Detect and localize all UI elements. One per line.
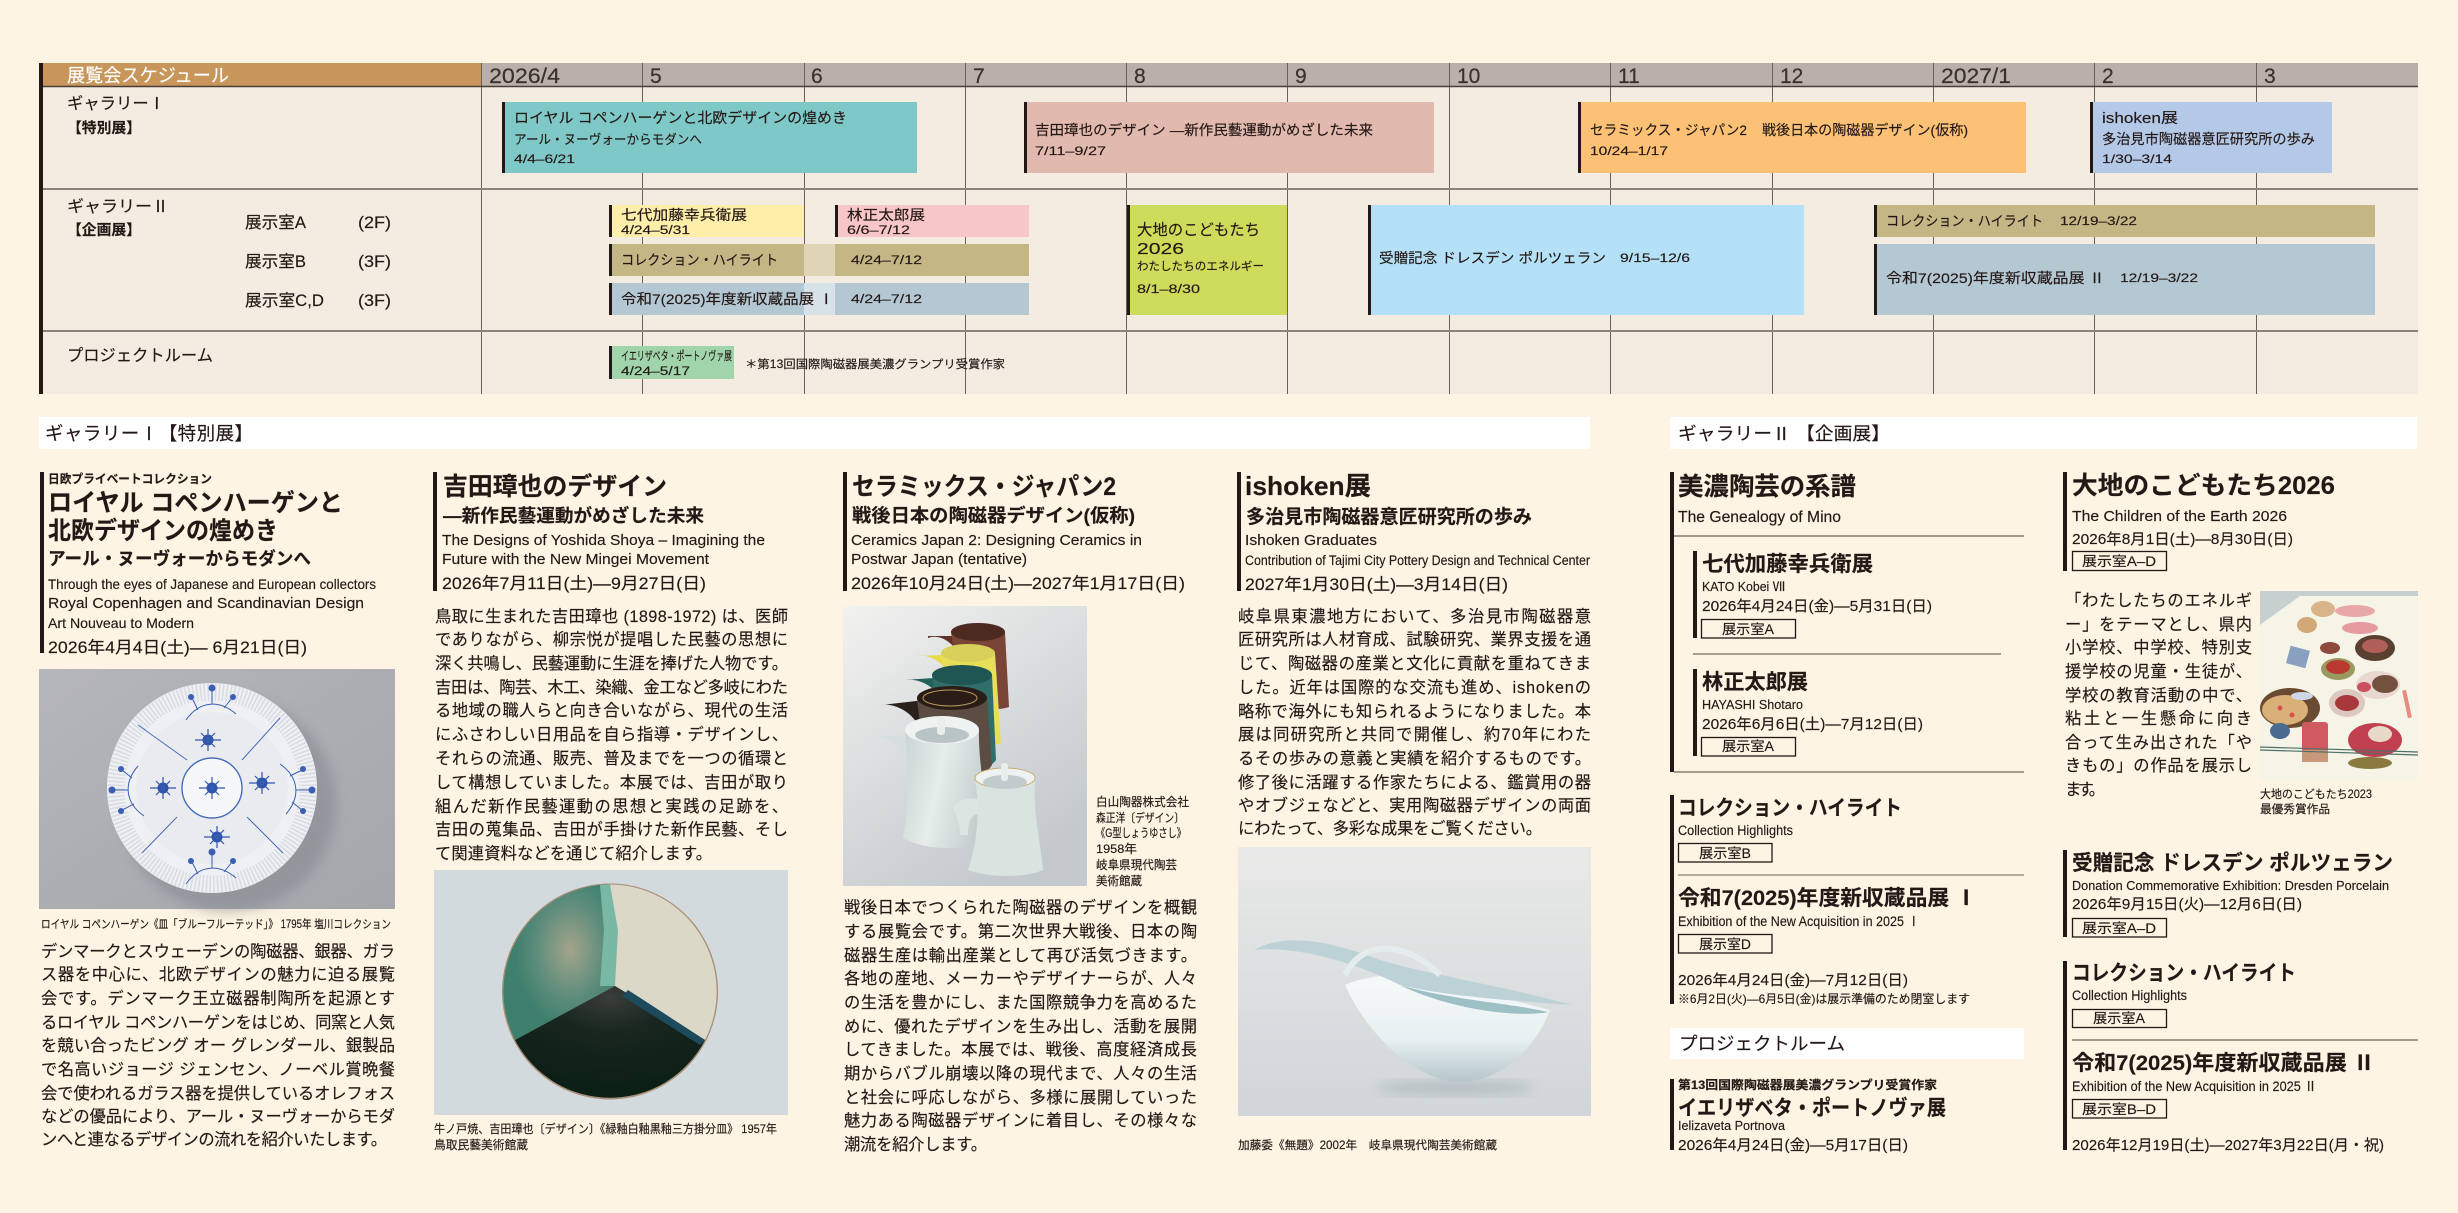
bar: Yoshida Shoya: 7/11–9/27 bbox=[1035, 144, 1106, 158]
bar: New Acquisition I: 令和7(2025)年度新収蔵品展 Ⅰ bbox=[621, 291, 834, 307]
panel: Ielizaveta Portnova exhibition bbox=[1670, 1077, 1946, 1154]
bar: Hayashi Shotaro: 林正太郎展 bbox=[847, 207, 925, 223]
body text: 戦後日本でつくられた陶磁器のデザインを概観 bbox=[844, 898, 1197, 917]
exhibition heading: Through the eyes of Japanese and European collectors bbox=[48, 576, 376, 592]
exhibition: New Acquisition I: Exhibition of the New Acquisition in 2025 Ⅰ bbox=[1678, 914, 1920, 929]
body text: 略称で海外にも知られるようになりました。本 bbox=[1238, 703, 1591, 721]
body text: 会で使われるガラス器を提供しているオレフォス bbox=[41, 1085, 395, 1103]
body text: きもの」の作品を展示し bbox=[2065, 757, 2252, 775]
panel: Collection Highlights and New Acquisition I bbox=[1670, 795, 2024, 1006]
sub-exhibition: Hayashi Shotaro: 展示室A bbox=[1722, 739, 1774, 754]
bar: New Acquisition I: 4/24–7/12 bbox=[851, 294, 922, 306]
sub-exhibition: Kato Kobei: 展示室A bbox=[1722, 622, 1774, 637]
bar: Ceramics Japan 2: セラミックス・ジャパン2 bbox=[1590, 122, 1747, 138]
bar: Children of the Earth: わたしたちのエネルギー bbox=[1137, 260, 1264, 273]
bar: ishoken: 多治見市陶磁器意匠研究所の歩み bbox=[2102, 131, 2315, 147]
body text: るその歩みの意義と実績を紹介するものです。 bbox=[1238, 750, 1591, 768]
exhibition heading: 2026年10月24日(土)—2027年1月17日(日) bbox=[851, 574, 1185, 593]
body text: 組んだ新作民藝運動の思想と実践の足跡を、 bbox=[435, 798, 788, 816]
caption: 加藤委《無題》2002年 岐阜県現代陶芸美術館蔵 bbox=[1238, 1138, 1497, 1152]
panel: Ielizaveta Portnova exhibition: 第13回国際陶磁器展美濃グランプリ受賞作家 bbox=[1678, 1077, 1937, 1092]
row labels: 展示室B bbox=[245, 253, 306, 271]
heading bbox=[1678, 473, 1856, 526]
bar: Children of the Earth: 8/1–8/30 bbox=[1137, 284, 1200, 296]
caption: 最優秀賞作品 bbox=[2260, 803, 2330, 816]
exhibition heading: Future with the New Mingei Movement bbox=[442, 551, 710, 568]
sub-exhibition: Hayashi Shotaro: 林正太郎展 bbox=[1702, 671, 1808, 694]
row labels: ギャラリーⅡ bbox=[67, 198, 169, 216]
panel: Gallery I heading: ギャラリーⅠ【特別展】 bbox=[45, 423, 253, 444]
body text: ンへと連なるデザインの流れを紹介いたします。 bbox=[41, 1130, 387, 1149]
exhibition: Collection Highlights: コレクション・ハイライト bbox=[2072, 962, 2296, 985]
heading: The Children of the Earth 2026 bbox=[2072, 509, 2287, 525]
row labels: (3F) bbox=[358, 253, 391, 271]
exhibition heading: 吉田璋也のデザイン bbox=[443, 472, 667, 501]
body text: で名高いジョージ ジェンセン、ノーベル賞晩餐 bbox=[41, 1061, 395, 1079]
row labels: 【企画展】 bbox=[67, 221, 141, 239]
bar: Royal Copenhagen: アール・ヌーヴォーからモダンへ bbox=[514, 132, 702, 147]
month header labels: 3 bbox=[2264, 65, 2276, 88]
body text: 合って生み出された「や bbox=[2065, 734, 2252, 752]
body text: する展覧会です。第二次世界大戦後、日本の陶 bbox=[844, 923, 1197, 941]
bar: Ielizaveta Portnova: イエリザベタ・ポートノヴァ展 bbox=[621, 348, 732, 363]
caption: 大地のこどもたち2023 bbox=[2260, 787, 2372, 801]
bar: Children of the Earth: 大地のこどもたち bbox=[1137, 221, 1260, 239]
exhibition heading: Ceramics Japan 2: Designing Ceramics in bbox=[851, 532, 1142, 549]
body text: を競い合ったビング オー グレンダール、銀製品 bbox=[41, 1037, 395, 1055]
bar: Royal Copenhagen bbox=[502, 102, 917, 173]
panel: Project Room heading bbox=[1670, 1028, 2024, 1059]
bar: Ceramics Japan 2: 戦後日本の陶磁器デザイン(仮称) bbox=[1762, 122, 1968, 138]
bar: ishoken: ishoken展 bbox=[2102, 111, 2178, 127]
panel: exhibition schedule bbox=[39, 63, 2418, 394]
heading: 2026年8月1日(土)—8月30日(日) bbox=[2072, 531, 2293, 548]
row labels: (2F) bbox=[358, 214, 391, 232]
photo: clay food artworks bbox=[2260, 591, 2418, 780]
body text bbox=[2065, 592, 2252, 799]
body text: の生活を豊かにし、また国際競争力を高めるた bbox=[844, 994, 1197, 1012]
panel: Dresden Porcelain exhibition: Donation Commemorative Exhibition: Dresden Porcelain bbox=[2072, 879, 2389, 893]
body text: 「わたしたちのエネルギ bbox=[2065, 592, 2252, 610]
panel: Royal Copenhagen exhibition bbox=[39, 471, 395, 1149]
photo: three-glaze plate bbox=[434, 870, 788, 1115]
exhibition: New Acquisition II: 2026年12月19日(土)—2027年3月22日(月・祝) bbox=[2072, 1137, 2384, 1154]
month header labels: 5 bbox=[650, 65, 662, 88]
body text bbox=[41, 942, 395, 1149]
exhibition: New Acquisition I bbox=[1678, 887, 1977, 1006]
body text: 展は同研究所と共同で開催し、約70年にわた bbox=[1238, 726, 1591, 744]
panel: Gallery I heading bbox=[39, 417, 1590, 449]
exhibition heading: 戦後日本の陶磁器デザイン(仮称) bbox=[852, 505, 1135, 526]
exhibition heading: 2027年1月30日(土)—3月14日(日) bbox=[1245, 575, 1508, 594]
schedule heading: 展覧会スケジュール bbox=[67, 65, 229, 86]
exhibition: New Acquisition II: Exhibition of the New Acquisition in 2025 Ⅱ bbox=[2072, 1079, 2317, 1094]
body text: それらの流通、販売、普及までを一つの循環と bbox=[435, 750, 788, 768]
body text: 粘土と一生懸命に向き bbox=[2065, 710, 2252, 728]
month header labels: 6 bbox=[811, 65, 823, 88]
body text: して構想していました。本展では、吉田が取り bbox=[435, 774, 788, 792]
exhibition: Collection Highlights bbox=[2072, 962, 2296, 1028]
row labels bbox=[67, 95, 391, 365]
panel: Children of the Earth 2026 bbox=[2063, 472, 2418, 816]
body text: 深く共鳴し、民藝運動に生涯を捧げた人物です。 bbox=[435, 655, 788, 673]
bar: ishoken bbox=[2090, 102, 2332, 173]
body text: 匠研究所は人材育成、試験研究、業界支援を通 bbox=[1238, 631, 1591, 649]
body text: 援学校の児童・生徒が、 bbox=[2065, 663, 2252, 681]
sub-exhibition: Kato Kobei: KATO Kobei Ⅶ bbox=[1702, 579, 1785, 594]
bar: Dresden Porcelain: 9/15–12/6 bbox=[1620, 253, 1690, 265]
body text: などの優品により、アール・ヌーヴォーからモダ bbox=[41, 1108, 395, 1126]
exhibition heading: 多治見市陶磁器意匠研究所の歩み bbox=[1246, 506, 1532, 528]
caption bbox=[1096, 794, 1189, 888]
exhibition heading: The Designs of Yoshida Shoya – Imagining the bbox=[442, 532, 765, 549]
body text: 修了後に活躍する作家たちによる、鑑賞用の器 bbox=[1238, 774, 1591, 792]
sub-exhibition: Kato Kobei: 七代加藤幸兵衛展 bbox=[1702, 553, 1873, 576]
heading: 美濃陶芸の系譜 bbox=[1678, 473, 1856, 501]
exhibition: Collection Highlights: Collection Highlights bbox=[1678, 823, 1793, 838]
body text: ます。 bbox=[2065, 781, 2105, 799]
exhibition: New Acquisition II: 令和7(2025)年度新収蔵品展 Ⅱ bbox=[2072, 1052, 2375, 1075]
exhibition: New Acquisition I: ※6月2日(火)—6月5日(金)は展示準備のため閉室します bbox=[1678, 991, 1970, 1006]
sub-exhibition: Kato Kobei: 2026年4月24日(金)—5月31日(日) bbox=[1702, 598, 1932, 615]
sub-exhibition: Hayashi Shotaro: HAYASHI Shotaro bbox=[1702, 697, 1803, 712]
heading bbox=[2072, 472, 2335, 570]
bar: New Acquisition II bbox=[1874, 244, 2375, 315]
exhibition heading bbox=[1245, 471, 1590, 594]
bar: Ielizaveta Portnova bbox=[609, 346, 734, 379]
panel: Gallery II heading bbox=[1670, 417, 2417, 449]
panel: Ielizaveta Portnova exhibition: 2026年4月24日(金)—5月17日(日) bbox=[1678, 1137, 1908, 1154]
caption: 鳥取民藝美術館蔵 bbox=[434, 1137, 528, 1152]
heading: 大地のこどもたち2026 bbox=[2072, 472, 2335, 500]
bar: Ceramics Japan 2 bbox=[1578, 102, 2026, 173]
panel: Dresden Porcelain exhibition bbox=[2063, 850, 2393, 937]
bar: Royal Copenhagen: 4/4–6/21 bbox=[514, 152, 575, 166]
body text: 各地の産地、メーカーやデザイナーらが、人々 bbox=[844, 969, 1197, 988]
month header labels: 7 bbox=[973, 65, 985, 88]
panel: Yoshida Shoya exhibition bbox=[433, 472, 788, 1152]
body text: でありながら、柳宗悦が提唱した民藝の思想に bbox=[435, 631, 788, 649]
exhibition heading: Royal Copenhagen and Scandinavian Design bbox=[48, 595, 364, 612]
bar: Kato Kobei bbox=[609, 205, 804, 237]
caption: 1958年 bbox=[1096, 842, 1137, 856]
body text: 吉田の蒐集品、吉田が手掛けた新作民藝、そし bbox=[435, 821, 788, 839]
body text: した。近年は国際的な交流も進め、ishokenの bbox=[1238, 679, 1591, 697]
panel: Ceramics Japan 2 exhibition bbox=[843, 472, 1197, 1154]
exhibition heading: 2026年4月4日(土)— 6月21日(日) bbox=[48, 638, 307, 657]
row labels: プロジェクトルーム bbox=[67, 347, 213, 365]
exhibition heading: ishoken展 bbox=[1245, 471, 1371, 501]
body text: 魅力ある陶磁器デザインに着目し、その様々な bbox=[844, 1111, 1197, 1130]
exhibition: New Acquisition II: 展示室B–D bbox=[2082, 1102, 2156, 1117]
exhibition heading bbox=[48, 471, 376, 657]
exhibition: Collection Highlights: 展示室A bbox=[2093, 1011, 2145, 1026]
photo: stacked soy sauce pots bbox=[843, 606, 1087, 886]
panel: Project Room heading: プロジェクトルーム bbox=[1679, 1034, 1845, 1054]
row labels: 展示室A bbox=[245, 214, 306, 232]
body text: て関連資料などを通じて紹介します。 bbox=[435, 845, 712, 863]
exhibition: Collection Highlights: 展示室B bbox=[1699, 846, 1751, 861]
caption bbox=[2260, 787, 2372, 816]
bar: Collection Highlights winter: コレクション・ハイライト bbox=[1886, 213, 2043, 229]
exhibition heading: Contribution of Tajimi City Pottery Design and Technical Center bbox=[1245, 553, 1590, 568]
month header labels: 12 bbox=[1780, 65, 1803, 88]
body text: 期からバブル崩壊以降の現代まで、人々の生活 bbox=[844, 1064, 1197, 1083]
month header labels: 11 bbox=[1618, 65, 1640, 88]
bar: New Acquisition II: 12/19–3/22 bbox=[2120, 273, 2198, 285]
body text bbox=[435, 608, 788, 863]
body text: 鳥取に生まれた吉田璋也 (1898-1972) は、医師 bbox=[435, 608, 788, 626]
row labels: (3F) bbox=[358, 292, 391, 310]
month header labels: 2 bbox=[2102, 65, 2114, 88]
exhibition heading bbox=[442, 472, 765, 593]
body text: 潮流を紹介します。 bbox=[844, 1136, 987, 1154]
caption: 岐阜県現代陶芸 bbox=[1096, 858, 1177, 872]
bar: Dresden Porcelain bbox=[1368, 205, 1804, 315]
caption: 《G型しょうゆさし》 bbox=[1096, 826, 1186, 840]
body text: めに、優れたデザインを生み出し、活動を展開 bbox=[844, 1017, 1197, 1036]
panel: Dresden Porcelain exhibition: 2026年9月15日(火)—12月6日(日) bbox=[2072, 896, 2302, 913]
bar: Collection Highlights spring: 4/24–7/12 bbox=[851, 255, 922, 267]
month header labels bbox=[489, 65, 2276, 88]
bar: Collection Highlights spring bbox=[609, 244, 1029, 276]
body text: してきました。本展では、戦後、高度経済成長 bbox=[844, 1041, 1197, 1059]
body text: 岐阜県東濃地方において、多治見市陶磁器意 bbox=[1238, 608, 1591, 626]
month header labels: 9 bbox=[1295, 65, 1307, 88]
bar: Children of the Earth: 2026 bbox=[1137, 241, 1184, 258]
bar: Hayashi Shotaro: 6/6–7/12 bbox=[847, 225, 910, 237]
exhibition heading: 北欧デザインの煌めき bbox=[48, 516, 278, 545]
month header labels: 8 bbox=[1134, 65, 1146, 88]
bar: Collection Highlights spring: コレクション・ハイライト bbox=[621, 252, 778, 268]
photo: white winged bowl bbox=[1238, 847, 1591, 1116]
panel: Dresden Porcelain exhibition: 受贈記念 ドレスデン ポルツェラン bbox=[2072, 851, 2393, 875]
bar: New Acquisition II: 令和7(2025)年度新収蔵品展 Ⅱ bbox=[1886, 270, 2105, 286]
bar: Royal Copenhagen: ロイヤル コペンハーゲンと北欧デザインの煌めき bbox=[514, 109, 847, 127]
body text: やオブジェなどと、実用陶磁器デザインの両面 bbox=[1238, 796, 1591, 815]
body text: にふさわしい日用品を自ら指導・デザインし、 bbox=[435, 725, 788, 744]
bar: Kato Kobei: 4/24–5/31 bbox=[621, 225, 690, 237]
exhibition: Collection Highlights: コレクション・ハイライト bbox=[1678, 797, 1902, 820]
body text: るロイヤル コペンハーゲンをはじめ、同窯と人気 bbox=[41, 1014, 395, 1032]
bar: Hayashi Shotaro bbox=[835, 205, 1029, 237]
exhibition: New Acquisition I: 令和7(2025)年度新収蔵品展 Ⅰ bbox=[1678, 887, 1977, 910]
body text: にわたって、多彩な成果をご覧ください。 bbox=[1238, 820, 1542, 838]
bar: New Acquisition I bbox=[609, 283, 1029, 315]
row labels: 展示室C,D bbox=[245, 292, 324, 310]
panel: Collection Highlights and New Acquisition II bbox=[2063, 961, 2418, 1154]
exhibition: Collection Highlights bbox=[1678, 797, 1902, 862]
heading: 展示室A–D bbox=[2082, 554, 2156, 569]
heading: The Genealogy of Mino bbox=[1678, 509, 1841, 526]
bar: Dresden Porcelain: 受贈記念 ドレスデン ポルツェラン bbox=[1379, 250, 1606, 266]
exhibition heading: Art Nouveau to Modern bbox=[48, 615, 194, 631]
exhibition: New Acquisition I: 展示室D bbox=[1699, 937, 1751, 952]
caption: 白山陶器株式会社 bbox=[1096, 794, 1189, 809]
body text: デンマークとスウェーデンの陶磁器、銀器、ガラ bbox=[41, 942, 395, 961]
body text: 吉田は、陶芸、木工、染織、金工など多岐にわた bbox=[435, 679, 788, 697]
month header labels: 2026/4 bbox=[489, 65, 560, 88]
bar: ishoken: 1/30–3/14 bbox=[2102, 152, 2172, 166]
exhibition: Collection Highlights: Collection Highlights bbox=[2072, 988, 2187, 1003]
row labels: 【特別展】 bbox=[67, 120, 141, 137]
caption: 美術館蔵 bbox=[1096, 873, 1142, 888]
photo: blue fluted plate bbox=[39, 669, 395, 912]
exhibition heading: Postwar Japan (tentative) bbox=[851, 551, 1027, 568]
panel: Genealogy of Mino bbox=[1670, 472, 2024, 772]
caption bbox=[434, 1121, 777, 1152]
exhibition: New Acquisition II bbox=[2072, 1052, 2384, 1154]
body text: る地域の職人らと向き合いながら、現代の生活 bbox=[435, 702, 788, 720]
body text bbox=[844, 898, 1197, 1154]
bar: Yoshida Shoya bbox=[1024, 102, 1434, 173]
body text: 磁器生産は輸出産業として再び活気づきます。 bbox=[844, 947, 1197, 965]
month header labels: 10 bbox=[1457, 65, 1480, 88]
exhibition heading: Ishoken Graduates bbox=[1245, 532, 1377, 549]
body text bbox=[1238, 608, 1591, 838]
body text: ー」をテーマとし、県内 bbox=[2065, 616, 2252, 634]
exhibition heading: 日欧プライベートコレクション bbox=[48, 471, 212, 486]
sub-exhibition: Kato Kobei bbox=[1693, 551, 1932, 638]
caption: ロイヤル コペンハーゲン《皿「ブルーフルーテッド」》 1795年 塩川コレクション bbox=[41, 917, 391, 931]
row labels: ギャラリーⅠ bbox=[67, 95, 165, 113]
panel: Ielizaveta Portnova exhibition: Ielizaveta Portnova bbox=[1678, 1118, 1786, 1133]
bar: Yoshida Shoya: 吉田璋也のデザイン —新作民藝運動がめざした未来 bbox=[1035, 122, 1373, 138]
exhibition heading: —新作民藝運動がめざした未来 bbox=[443, 505, 704, 526]
body text: 学校の教育活動の中で、 bbox=[2065, 687, 2252, 705]
month header labels: 2027/1 bbox=[1941, 65, 2011, 88]
body text: じて、陶磁器の産業と文化に貢献を重ねてきま bbox=[1238, 655, 1591, 673]
body text: ス器を中心に、北欧デザインの魅力に迫る展覧 bbox=[41, 965, 395, 984]
sub-exhibition: Hayashi Shotaro: 2026年6月6日(土)—7月12日(日) bbox=[1702, 716, 1923, 733]
bar: Collection Highlights winter bbox=[1874, 205, 2375, 237]
bar: Ielizaveta Portnova: 4/24–5/17 bbox=[621, 366, 690, 378]
exhibition heading: セラミックス・ジャパン2 bbox=[852, 473, 1116, 501]
caption: 牛ノ戸焼、吉田璋也〔デザイン〕《緑釉白釉黒釉三方掛分皿》 1957年 bbox=[434, 1121, 777, 1136]
sub-exhibition: Hayashi Shotaro bbox=[1693, 669, 1923, 756]
body text: 会です。デンマーク王立磁器制陶所を起源とす bbox=[41, 989, 395, 1008]
exhibition heading: ロイヤル コペンハーゲンと bbox=[48, 489, 343, 517]
exhibition heading: アール・ヌーヴォーからモダンへ bbox=[48, 548, 311, 569]
body text: 小学校、中学校、特別支 bbox=[2065, 639, 2252, 657]
exhibition heading: 2026年7月11日(土)—9月27日(日) bbox=[442, 574, 706, 593]
bar: Children of the Earth bbox=[1127, 205, 1287, 315]
bar: Ceramics Japan 2: 10/24–1/17 bbox=[1590, 144, 1668, 158]
schedule note: ＊第13回国際陶磁器展美濃グランプリ受賞作家 bbox=[745, 357, 1005, 371]
panel: Dresden Porcelain exhibition: 展示室A–D bbox=[2082, 921, 2156, 936]
panel: ishoken exhibition bbox=[1237, 471, 1591, 1152]
bar: Collection Highlights winter: 12/19–3/22 bbox=[2060, 216, 2137, 228]
panel: Ielizaveta Portnova exhibition: イエリザベタ・ポートノヴァ展 bbox=[1678, 1096, 1946, 1120]
body text: と社会に呼応しながら、多様に展開していった bbox=[844, 1089, 1197, 1107]
bar: Kato Kobei: 七代加藤幸兵衛展 bbox=[621, 207, 747, 223]
exhibition heading bbox=[851, 473, 1185, 593]
panel: Gallery II heading: ギャラリーⅡ 【企画展】 bbox=[1678, 424, 1890, 444]
caption: 森正洋〔デザイン〕 bbox=[1096, 810, 1184, 825]
exhibition: New Acquisition I: 2026年4月24日(金)—7月12日(日) bbox=[1678, 972, 1908, 989]
